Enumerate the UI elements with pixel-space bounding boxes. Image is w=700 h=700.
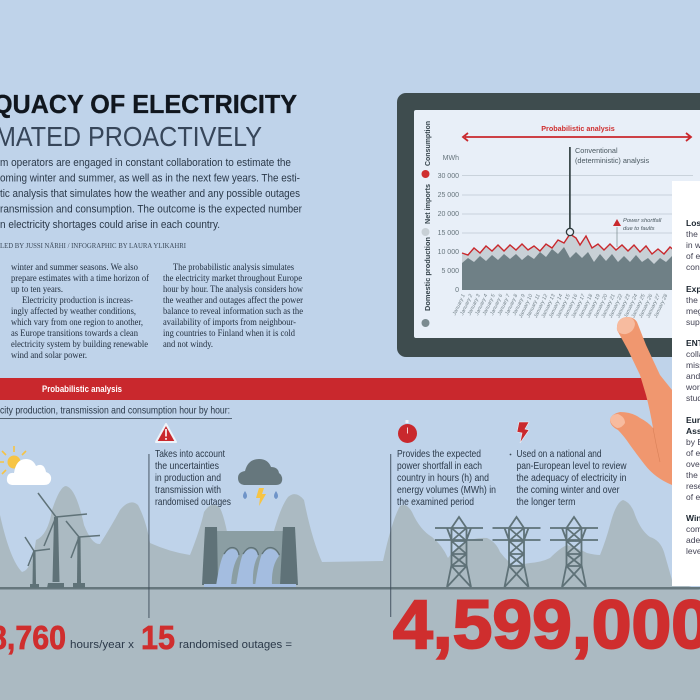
article column 2: The probabilistic analysis simulates (173, 263, 294, 273)
chart: y axis labels and gridlines: MWh (443, 155, 459, 162)
landscape: mountains and ground (0, 486, 700, 700)
icon: stopwatch (398, 420, 417, 443)
article column 1: winter and summer seasons. We also (11, 263, 138, 273)
chart: legend: Domestic production (423, 237, 432, 311)
text: used on a national level: the adequacy of electricity in (516, 473, 627, 484)
article column 2: availability of imports from neighbour- (163, 317, 296, 328)
pylon 3 (550, 517, 598, 587)
chart: x axis dates: January 21 (600, 293, 617, 320)
text: used on a national level: pan-European level to review (516, 461, 627, 472)
chart: y axis labels and gridlines: 5 000 (441, 268, 459, 275)
chart: x axis dates: January 24 (623, 293, 639, 320)
article column 1: which vary from one region to another, (11, 317, 143, 328)
pylon 2 (492, 517, 540, 587)
intro text block: oming winter and summer, as well as in the next few years. The esti- (0, 172, 300, 184)
title (0, 91, 297, 152)
chart: x axis dates: January 23 (615, 293, 632, 320)
chart: probabilistic arrow (463, 124, 691, 141)
text: provides the expected: country in hours (h) and (397, 473, 489, 484)
chart: x axis dates: January 14 (548, 293, 564, 320)
red band: probabilistic analysis: Probabilistic analysis (42, 384, 122, 395)
chart: x axis dates: January 6 (489, 293, 504, 317)
chart: x axis dates: January 12 (533, 293, 549, 320)
chart: x axis dates: January 10 (518, 293, 534, 320)
intro text block: m operators are engaged in constant collaboration to estimate the (0, 157, 291, 169)
icon: warning triangle (156, 424, 176, 442)
text: takes into account: the uncertainties (155, 461, 219, 472)
article column 2: hour by hour. The analysis considers how (163, 285, 303, 295)
chart: x axis dates: January 11 (525, 293, 542, 320)
chart: x axis dates: January 7 (496, 292, 512, 317)
chart: y axis labels and gridlines: 20 000 (438, 211, 459, 218)
article column 2: balance to reveal information such as the (163, 306, 303, 317)
text: used on a national level: Used on a national and (516, 449, 602, 460)
article column 2 (163, 263, 304, 350)
text: used on a national level: the longer term (516, 497, 576, 508)
title: QUACY OF ELECTRICITY (0, 91, 297, 119)
chart: x axis dates: January 16 (563, 293, 579, 320)
article column 1: prepare estimates with a time horizon of (11, 273, 150, 284)
formula: hours times outages: 15 (141, 619, 175, 656)
chart: x axis dates (451, 292, 669, 320)
formula: hours times outages: hours/year x (70, 639, 135, 651)
text: provides the expected: the examined period (397, 497, 474, 508)
chart: y axis labels and gridlines: 10 000 (438, 249, 459, 256)
article column 1: Electricity production is increas- (22, 296, 133, 306)
text: provides the expected: power shortfall in each (397, 461, 482, 472)
chart: conventional analysis marker: (deterministic) analysis (575, 156, 650, 165)
text: used on a national level: the coming winter and over (516, 485, 620, 496)
article column 1: as Europe transitions towards a clean (11, 329, 138, 339)
chart: legend: Net imports (423, 184, 432, 224)
chart: x axis dates: January 1 (451, 293, 467, 317)
chart: y axis labels and gridlines: 15 000 (438, 230, 459, 237)
tablet (397, 93, 700, 357)
chart: x axis dates: January 13 (540, 293, 557, 320)
panel: glossary (672, 181, 700, 586)
chart: x axis dates: January 20 (593, 293, 609, 320)
text: provides the expected: Provides the expected (397, 449, 481, 460)
icon: hydro dam (202, 527, 298, 587)
chart: x axis dates: January 25 (630, 293, 647, 320)
chart: y axis labels and gridlines: 30 000 (438, 173, 459, 180)
chart: x axis dates: January 22 (608, 293, 624, 320)
chart: x axis dates: January 27 (645, 292, 662, 320)
chart: x axis dates: January 28 (653, 293, 669, 320)
chart: x axis dates: January 5 (481, 293, 497, 317)
chart: conventional analysis marker (566, 146, 650, 236)
icon: lightning bolt (517, 422, 529, 443)
article column 1 (11, 263, 150, 361)
text: takes into account: transmission with (155, 485, 221, 496)
chart: x axis dates: January 4 (474, 293, 489, 317)
panel: glossary: and (686, 371, 700, 381)
chart: y axis labels and gridlines (438, 155, 693, 294)
red band: probabilistic analysis (0, 378, 650, 400)
title: MATED PROACTIVELY (0, 121, 262, 152)
icon: wind turbines (25, 493, 100, 588)
chart: legend: Consumption (423, 121, 432, 166)
intro text block: ransmission and consumption. The outcome is the expected number (0, 204, 302, 216)
subheading with rule: city production, transmission and consumption hour by hour: (0, 404, 230, 416)
text: takes into account: in production and (155, 473, 221, 484)
chart: power shortfall callout: Power shortfall (623, 218, 662, 224)
chart: x axis dates: January 15 (555, 293, 572, 320)
article column 1: ingly affected by weather conditions, (11, 306, 136, 317)
article column 2: the weather and outages affect the power (163, 295, 304, 306)
chart: x axis dates: January 19 (585, 293, 602, 320)
text: provides the expected (390, 449, 496, 617)
text: provides the expected: energy volumes (MWh) in (397, 485, 496, 496)
chart: domestic production area (462, 247, 693, 290)
icon: transmission pylons (435, 517, 598, 587)
chart: consumption line (462, 234, 693, 255)
chart: x axis dates: January 17 (570, 292, 587, 320)
chart: conventional analysis marker: Conventional (575, 146, 618, 155)
intro text block (0, 157, 302, 231)
pylon 1 (435, 517, 483, 587)
chart: legend (422, 121, 432, 327)
chart: y axis labels and gridlines: 25 000 (438, 192, 459, 199)
article column 1: electricity system by building renewable (11, 340, 148, 350)
chart: x axis dates: January 26 (638, 293, 654, 320)
article column 1: up to ten years. (11, 285, 63, 295)
formula: hours times outages (0, 619, 292, 656)
intro text block: tic analysis that simulates how the weather and any possible outages (0, 188, 300, 200)
icon: storm cloud with rain and lightning (238, 459, 282, 506)
chart: x axis dates: January 3 (466, 293, 482, 317)
chart: x axis dates: January 9 (511, 293, 527, 317)
text: takes into account (148, 449, 231, 618)
article column 2: the electricity market throughout Europe (163, 274, 302, 284)
chart: x axis dates: January 2 (459, 293, 474, 317)
chart: probabilistic arrow: Probabilistic analysis (541, 124, 615, 133)
text: takes into account: Takes into account (155, 449, 225, 460)
text: takes into account: randomised outages (155, 497, 231, 508)
chart: power shortfall callout (613, 218, 662, 247)
chart: power shortfall callout: due to faults (623, 226, 655, 232)
formula: hours times outages: randomised outages = (179, 639, 292, 651)
icon: sun behind cloud (0, 446, 51, 485)
chart: x axis dates: January 8 (504, 293, 519, 317)
panel: glossary: the (686, 470, 698, 480)
article column 1: wind and solar power. (11, 351, 87, 361)
icon: hand pointing at chart (610, 317, 680, 492)
intro text block: n electricity shortages could arise in each country. (0, 219, 220, 231)
text: used on a national level (510, 449, 627, 508)
byline: LED BY JUSSI NÄRHI / INFOGRAPHIC BY LAURA YLIKAHRI (0, 243, 187, 250)
chart: net imports area (462, 234, 693, 290)
article column 2: and not windy. (163, 340, 213, 350)
big result number: 4,599,000 (393, 586, 700, 663)
chart: x axis dates: January 18 (578, 293, 594, 320)
chart: y axis labels and gridlines: 0 (455, 287, 459, 294)
article column 2: ing countries to Finland when it is cold (163, 329, 295, 339)
